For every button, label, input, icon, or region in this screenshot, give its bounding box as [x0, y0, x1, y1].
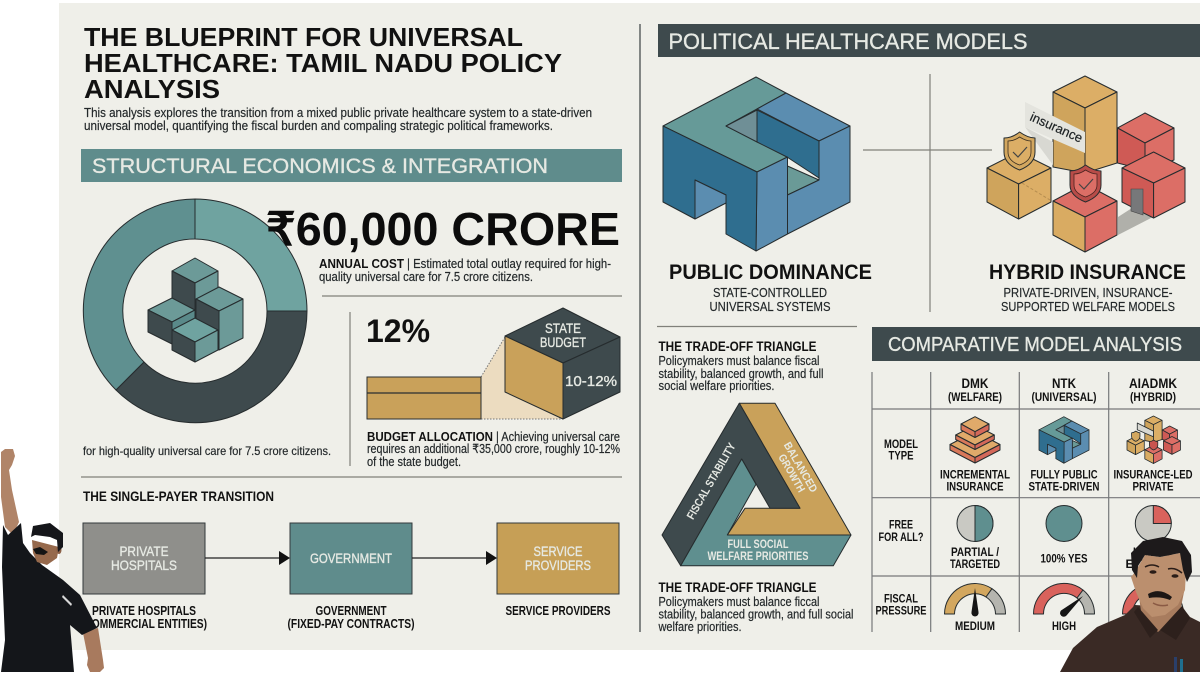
box: government: GOVERNMENT [310, 551, 392, 566]
title: THE BLUEPRINT FOR UNIVERSAL [84, 22, 523, 52]
chart: impossible trade-off triangle: WELFARE PRIORITIES [708, 551, 809, 563]
free for all labels: ELIGIBLE [1126, 557, 1180, 571]
box: private hospitals: HOSPITALS [111, 558, 177, 573]
column headers: NTK [1052, 376, 1076, 391]
model type labels: INCREMENTAL [940, 468, 1010, 482]
gauge labels [955, 619, 1076, 633]
free for all labels: LIMITED [1133, 545, 1173, 559]
flow captions [81, 604, 610, 631]
table: comparative model [872, 372, 1200, 633]
gold tall block [1053, 76, 1117, 173]
budget allocation description: of the state budget. [367, 455, 461, 469]
label: hybrid insurance: HYBRID INSURANCE [989, 261, 1186, 284]
free for all labels: TARGETED [950, 557, 1000, 571]
text: trade-off triangle bottom [658, 580, 854, 634]
annual cost description: | Estimated total outlay required for high- [407, 257, 611, 271]
box: private hospitals: PRIVATE [120, 544, 168, 559]
flow captions: GOVERNMENT [316, 604, 387, 618]
gauge labels: HIGH [1052, 619, 1076, 633]
big number: annual cost: ₹60,000 CRORE [266, 203, 620, 255]
column headers: (HYBRID) [1130, 390, 1176, 404]
column headers: (UNIVERSAL) [1032, 390, 1096, 404]
row labels [876, 437, 926, 618]
title: ANALYSIS [84, 74, 220, 104]
donut chart with cube cluster [83, 199, 307, 423]
annual cost description: quality universal care for 7.5 crore citizens. [319, 270, 533, 284]
model type labels: FULLY PUBLIC [1030, 468, 1098, 482]
chart: budget bar and state budget cube [367, 308, 620, 419]
donut caption: for high-quality universal care for 7.5 crore citizens. [83, 444, 331, 458]
flow captions: (FIXED-PAY CONTRACTS) [288, 617, 414, 631]
heading: comparative model analysis [872, 327, 1200, 361]
budget allocation description: requires an additional ₹35,000 crore, roughly 10-12% [367, 442, 620, 456]
flow captions: SERVICE PROVIDERS [506, 604, 610, 618]
pie: NTK full [1046, 506, 1082, 542]
box: private hospitals [83, 523, 205, 594]
figure: man portrait, right [1060, 537, 1200, 672]
heading: single-payer transition: THE SINGLE-PAYER TRANSITION [83, 488, 274, 504]
insurance tag: insurance [1028, 109, 1085, 146]
icon: small public block [1039, 417, 1089, 463]
text: trade-off triangle top: Policymakers must balance fiscal [658, 354, 820, 368]
row labels: FOR ALL? [878, 530, 924, 544]
front block [1053, 184, 1117, 252]
heading: political healthcare models: POLITICAL HEALTHCARE MODELS [668, 29, 1028, 54]
label: public dominance: PUBLIC DOMINANCE [669, 261, 872, 284]
arrow head [279, 551, 290, 565]
flow diagram: single payer [83, 523, 619, 594]
icon: red shield [1070, 165, 1101, 202]
text: trade-off triangle top: THE TRADE-OFF TRIANGLE [658, 339, 816, 354]
title: HEALTHCARE: TAMIL NADU POLICY [84, 48, 562, 78]
row labels: TYPE [888, 448, 914, 462]
arrow: government to providers [412, 557, 487, 559]
insurance tag [1025, 102, 1085, 165]
heading: structural economics [81, 149, 622, 182]
gauge: NTK high [1033, 583, 1095, 617]
heading: structural economics: STRUCTURAL ECONOMICS & INTEGRATION [92, 154, 548, 178]
heading: political healthcare models [658, 24, 1200, 57]
flow captions: (COMMERCIAL ENTITIES) [81, 617, 207, 631]
icon: isometric cubes [148, 258, 243, 362]
gauge: DMK medium [944, 584, 1006, 616]
label: public dominance: STATE-CONTROLLED [713, 285, 827, 300]
text: trade-off triangle bottom: welfare priorities. [658, 620, 742, 634]
pie: DMK partial [957, 506, 993, 542]
budget allocation description: | Achieving universal care [496, 430, 620, 444]
box: service providers [497, 523, 619, 594]
free for all labels: 100% YES [1040, 552, 1088, 566]
label: public dominance: UNIVERSAL SYSTEMS [710, 299, 831, 314]
row labels: PRESSURE [876, 604, 926, 618]
budget allocation description [367, 429, 620, 469]
label: hybrid insurance: PRIVATE-DRIVEN, INSURANCE- [1004, 285, 1172, 300]
label: hybrid insurance [989, 261, 1186, 314]
chart: budget bar and state budget cube: BUDGET [540, 335, 586, 350]
budget allocation description: BUDGET ALLOCATION [367, 429, 493, 444]
free for all labels: PARTIAL / [951, 545, 1000, 559]
flow captions: PRIVATE HOSPITALS [92, 604, 196, 618]
intro text: universal model, quantifying the fiscal burden and compaling strategic political frameworks. [84, 119, 553, 133]
chart: budget bar and state budget cube: STATE [545, 321, 581, 336]
column headers [948, 376, 1177, 404]
title [84, 22, 562, 104]
label: hybrid insurance: SUPPORTED WELFARE MODELS [1001, 299, 1175, 314]
model type labels: PRIVATE [1132, 480, 1174, 494]
annual cost description: ANNUAL COST [319, 257, 404, 271]
stat: 12%: 12% [366, 313, 430, 349]
gauge: AIADMK [1122, 583, 1184, 614]
chart: impossible trade-off triangle: BALANCED [781, 440, 819, 495]
model type labels: INSURANCE [946, 480, 1004, 494]
chart: budget bar and state budget cube: 10-12% [565, 373, 617, 390]
box: government [290, 523, 412, 594]
box: service providers: SERVICE [534, 544, 582, 559]
model type labels [940, 468, 1193, 494]
chart: impossible trade-off triangle: FULL SOCIAL [728, 539, 788, 551]
pie: AIADMK limited [1135, 506, 1171, 542]
column headers: (WELFARE) [948, 390, 1002, 404]
chart: impossible trade-off triangle: FISCAL STABILITY [685, 441, 739, 522]
red front block [1118, 152, 1185, 235]
chart: impossible trade-off triangle: GROWTH [775, 452, 807, 495]
text: trade-off triangle top [658, 339, 824, 393]
row labels: FISCAL [884, 592, 918, 606]
label: public dominance [669, 261, 872, 314]
arrow head [486, 551, 497, 565]
free for all labels [950, 545, 1180, 571]
heading: comparative model analysis: COMPARATIVE MODEL ANALYSIS [888, 334, 1182, 356]
red back block [1118, 113, 1174, 170]
row labels: MODEL [884, 437, 918, 451]
icon: small hybrid blocks [1127, 416, 1180, 464]
intro text: This analysis explores the transition from a mixed public private healthcare system to a state-driven [84, 106, 592, 120]
gold left block [987, 152, 1051, 219]
text: trade-off triangle top: social welfare priorities. [658, 379, 774, 393]
icon: stepped pyramid [950, 417, 1000, 463]
column headers: DMK [962, 376, 989, 391]
annual cost description [319, 257, 611, 284]
chart: impossible trade-off triangle [662, 403, 851, 566]
arrow: private to government [205, 557, 280, 559]
text: trade-off triangle bottom: THE TRADE-OFF TRIANGLE [658, 580, 816, 595]
icon: gold shield [1004, 132, 1035, 170]
model type labels: STATE-DRIVEN [1028, 480, 1100, 494]
row labels: FREE [889, 518, 913, 532]
text: trade-off triangle bottom: stability, balanced growth, and full social [658, 608, 854, 622]
gauge labels: MEDIUM [955, 619, 995, 633]
icon: hybrid insurance blocks [987, 76, 1185, 252]
icon: public dominance block [663, 77, 850, 251]
intro text [84, 106, 592, 133]
text: trade-off triangle bottom: Policymakers must balance ficcal [658, 595, 820, 609]
figure: man raising fist, left [1, 449, 104, 672]
text: trade-off triangle top: stability, balanced growth, and full [658, 367, 824, 381]
column headers: AIADMK [1129, 376, 1177, 391]
box: service providers: PROVIDERS [525, 558, 591, 573]
